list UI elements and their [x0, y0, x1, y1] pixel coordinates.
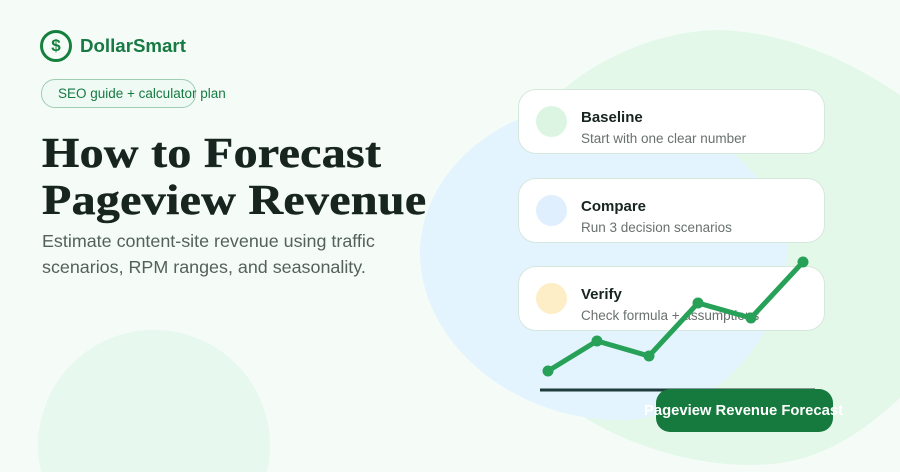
subtitle: Estimate content-site revenue using traffic — [42, 231, 375, 251]
card: baseline — [518, 89, 825, 154]
icon: yellow dot — [536, 283, 567, 314]
tag text: SEO guide + calculator plan — [58, 86, 226, 101]
icon: blue dot — [536, 195, 567, 226]
card: baseline: Baseline — [581, 109, 643, 126]
title: Pageview Revenue — [42, 178, 426, 224]
title: How to Forecast — [42, 131, 381, 177]
card: compare: Run 3 decision scenarios — [581, 220, 732, 235]
button label: Pageview Revenue Forecast — [644, 403, 843, 419]
card text — [581, 198, 732, 235]
brand name: DollarSmart — [80, 35, 186, 56]
icon: dollar coin: $ — [51, 36, 61, 55]
card: compare: Compare — [581, 198, 646, 215]
card text — [581, 286, 759, 323]
icon: dollar coin — [40, 30, 72, 62]
logo — [40, 30, 186, 62]
card text — [581, 109, 746, 146]
title — [42, 131, 426, 224]
subtitle: scenarios, RPM ranges, and seasonality. — [42, 257, 366, 277]
icon: green dot — [536, 106, 567, 137]
card: verify: Check formula + assumptions — [581, 308, 759, 323]
card: baseline: Start with one clear number — [581, 131, 746, 146]
button — [656, 389, 833, 432]
card: verify — [518, 266, 825, 331]
card: verify: Verify — [581, 286, 622, 303]
subtitle — [42, 231, 375, 277]
card: compare — [518, 178, 825, 243]
tag pill — [41, 79, 196, 108]
